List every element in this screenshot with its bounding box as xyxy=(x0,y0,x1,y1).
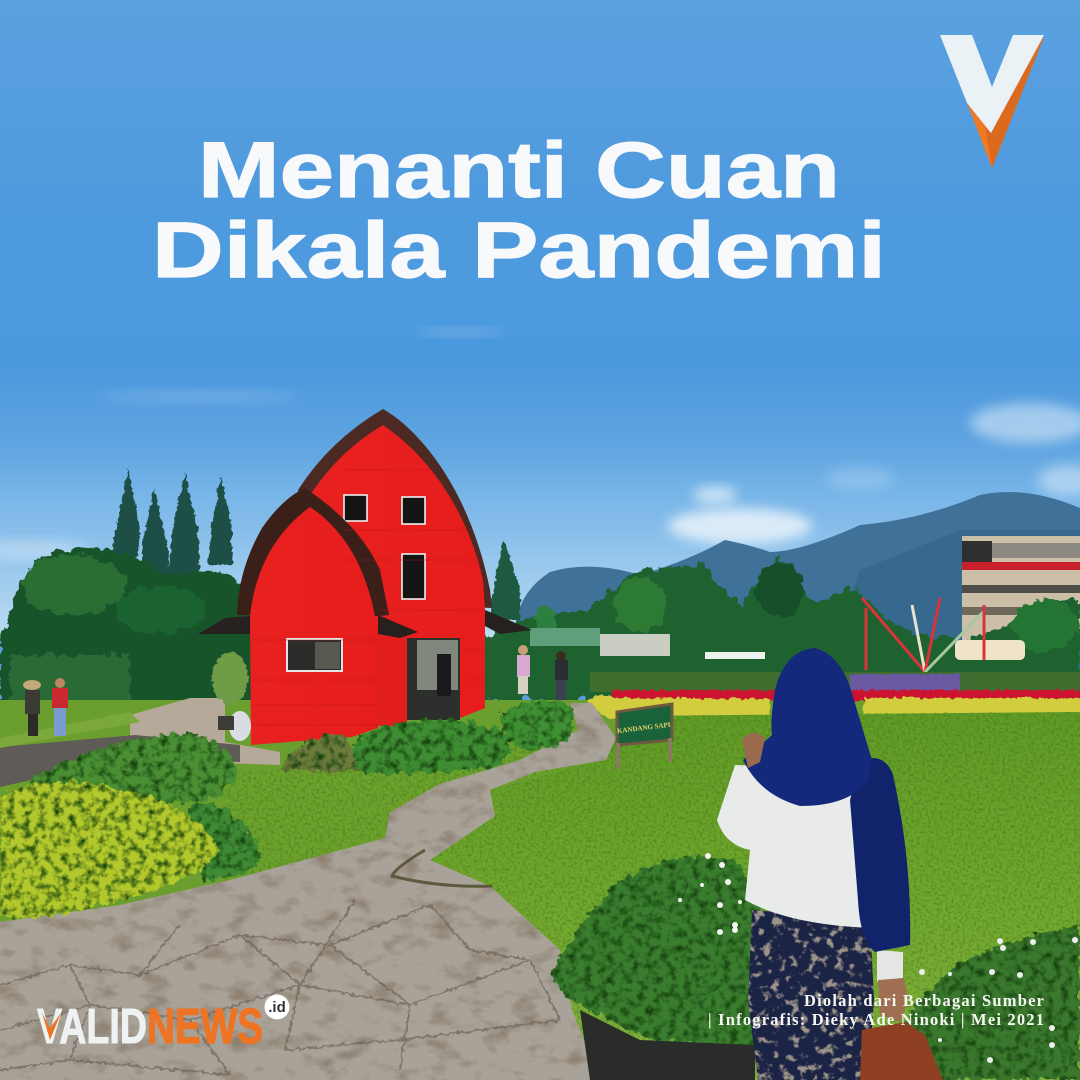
validnews logo: VALID xyxy=(37,1000,147,1054)
main barn wall xyxy=(310,425,485,720)
lower extension wall xyxy=(378,636,407,726)
house front shrubs xyxy=(280,700,575,774)
stone plaza with winding path xyxy=(0,703,616,1080)
raised hand xyxy=(742,732,765,768)
background trees left xyxy=(0,548,265,725)
carnival decoration xyxy=(862,598,985,672)
background trees right xyxy=(470,555,1080,700)
small barn wall xyxy=(250,507,378,745)
source credit: | Infografis: Dieky Ade Ninoki | Mei 2021 xyxy=(708,1010,1044,1029)
validnews logo xyxy=(37,994,290,1054)
yellow-green shrub xyxy=(0,781,220,918)
red barn house xyxy=(198,409,532,745)
green shrub right xyxy=(190,804,262,880)
brand V logo xyxy=(940,35,1044,168)
title xyxy=(152,125,886,294)
mountains xyxy=(516,492,1080,680)
foreground flower bush and planter xyxy=(550,853,760,1080)
lower window xyxy=(287,639,342,671)
green shrub back xyxy=(30,733,237,805)
validnews logo: .id xyxy=(268,999,286,1016)
small potted plant xyxy=(212,652,248,730)
woman in hijab xyxy=(717,648,943,1080)
clouds xyxy=(0,328,1080,560)
flower beds xyxy=(588,672,1080,718)
source credit xyxy=(708,991,1044,1029)
sign board xyxy=(616,704,672,769)
garden structures xyxy=(530,628,1025,660)
trousers xyxy=(748,910,874,1080)
main barn roof xyxy=(298,409,492,608)
small barn roof xyxy=(237,488,389,616)
validnews logo: NEWS xyxy=(147,1000,263,1054)
paved area and road xyxy=(0,698,280,787)
lawn right xyxy=(300,712,1080,1080)
lower hand xyxy=(878,978,908,1022)
path edge shadow xyxy=(392,850,492,886)
sky background xyxy=(0,0,1080,640)
title: Menanti Cuan xyxy=(198,125,840,214)
title: Dikala Pandemi xyxy=(152,205,886,294)
white bag by house xyxy=(229,711,251,741)
doorway opening xyxy=(407,638,460,720)
lawn left xyxy=(225,736,600,890)
tall pine trees xyxy=(110,468,520,620)
right foreground bush xyxy=(900,925,1080,1080)
white shirt xyxy=(717,765,872,928)
background buildings xyxy=(962,536,1080,640)
scarf tail xyxy=(850,758,910,952)
siding lines xyxy=(252,470,485,725)
source credit: Diolah dari Berbagai Sumber xyxy=(804,991,1044,1010)
left foreground bushes xyxy=(0,733,262,918)
brown handbag xyxy=(860,1022,943,1080)
awnings xyxy=(198,610,532,638)
visitors near house xyxy=(23,645,568,736)
hijab xyxy=(743,648,872,806)
shirt sleeve end xyxy=(877,950,903,982)
base ground xyxy=(0,700,1080,1080)
upper windows xyxy=(344,495,425,599)
sign board: KANDANG SAPI xyxy=(617,721,671,735)
